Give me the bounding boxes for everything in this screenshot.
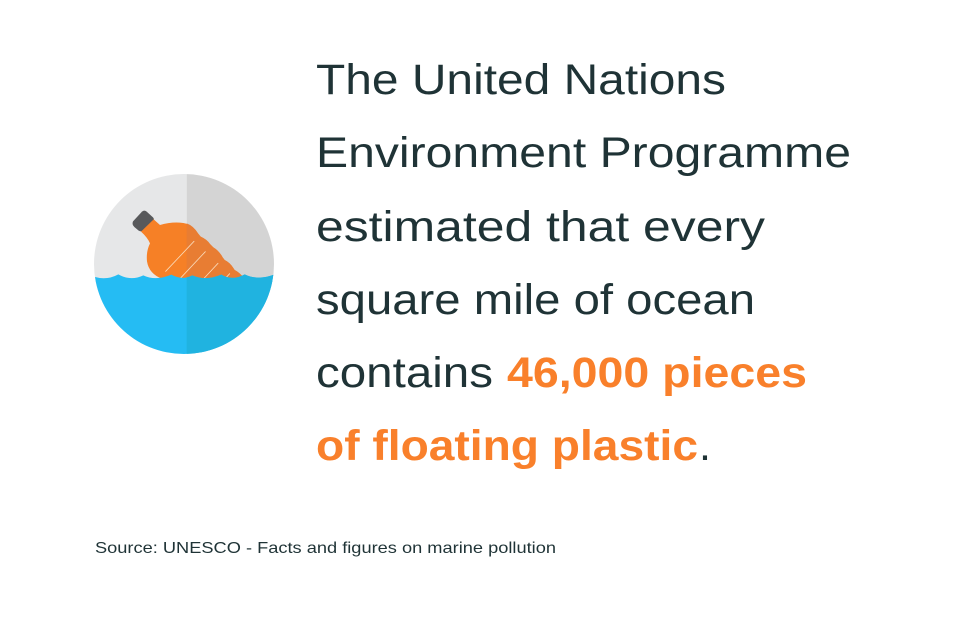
main statement text: of floating plastic [316, 422, 698, 470]
source note: Source: UNESCO - Facts and figures on marine pollution [95, 540, 556, 557]
main statement text: . [699, 422, 711, 470]
icon: plastic bottle floating in water [94, 174, 274, 354]
main statement text: square mile of ocean [316, 276, 755, 324]
bottle cap [133, 211, 154, 231]
main statement text: 46,000 pieces [507, 349, 807, 397]
main statement text: estimated that every [316, 203, 766, 251]
water [95, 274, 274, 354]
sky background [94, 174, 186, 278]
main statement text: Environment Programme [316, 129, 851, 177]
main statement text [316, 56, 851, 470]
main statement text: The United Nations [316, 56, 726, 104]
bottle body [141, 219, 245, 279]
main statement text: contains [316, 349, 493, 397]
bottle highlights [166, 241, 230, 278]
